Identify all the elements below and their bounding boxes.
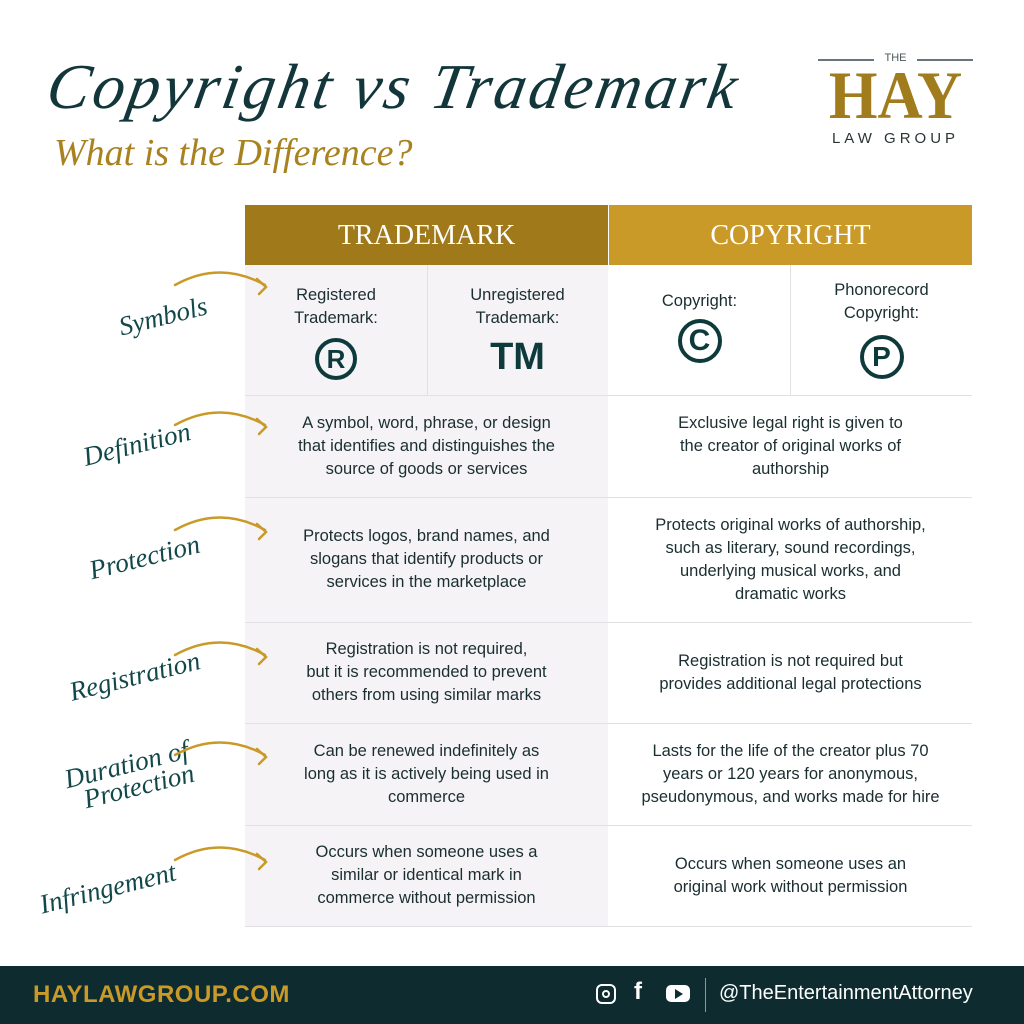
registration row xyxy=(306,640,547,704)
logo xyxy=(818,52,973,147)
definition row: source of goods or services xyxy=(326,460,527,478)
text: Protection xyxy=(80,758,197,814)
text: authorship xyxy=(752,460,829,478)
duration row: long as it is actively being used in xyxy=(304,764,549,782)
text: Definition xyxy=(80,416,194,472)
symbol: TM xyxy=(470,286,565,378)
definition row: that identifies and distinguishes the xyxy=(298,436,555,454)
symbol: phonorecord: Copyright: xyxy=(844,304,919,322)
definition row xyxy=(298,414,555,478)
symbol: copyright: C xyxy=(689,324,710,357)
social icons xyxy=(596,984,616,1004)
symbol: registered: Trademark: xyxy=(294,309,378,327)
registration row: but it is recommended to prevent xyxy=(306,663,547,681)
symbol: registered: R xyxy=(327,344,345,374)
text: the creator of original works of xyxy=(680,436,901,454)
symbol: registered xyxy=(294,286,378,380)
infringement row: Occurs when someone uses a xyxy=(316,843,537,861)
symbol: TM: Trademark: xyxy=(476,309,559,327)
subtitle: What is the Difference? xyxy=(54,132,412,174)
duration row xyxy=(304,742,549,806)
footer xyxy=(0,966,1024,1024)
protection row: slogans that identify products or xyxy=(310,550,543,568)
infringement row: similar or identical mark in xyxy=(331,866,522,884)
handle: @TheEntertainmentAttorney xyxy=(719,982,973,1004)
symbol: TM: Unregistered xyxy=(470,286,565,304)
text: such as literary, sound recordings, xyxy=(665,538,916,556)
text: pseudonymous, and works made for hire xyxy=(641,788,940,806)
header: copyright xyxy=(609,205,972,265)
arrows xyxy=(174,271,268,870)
symbol: phonorecord xyxy=(834,281,929,379)
text: years or 120 years for anonymous, xyxy=(663,764,918,782)
footer: f xyxy=(634,978,642,1005)
registration row: others from using similar marks xyxy=(312,686,541,704)
logo: HAY xyxy=(829,57,962,133)
duration row: commerce xyxy=(388,788,465,806)
symbol: registered: Registered xyxy=(296,286,376,304)
infringement row: commerce without permission xyxy=(317,889,536,907)
title: Copyright vs Trademark xyxy=(42,51,746,122)
symbol: phonorecord: Phonorecord xyxy=(834,281,929,299)
logo: THE xyxy=(884,52,906,64)
protection row: services in the marketplace xyxy=(327,573,526,591)
definition row: A symbol, word, phrase, or design xyxy=(302,414,551,432)
text: Exclusive legal right is given to xyxy=(678,414,903,432)
row labels: Symbols xyxy=(116,291,210,341)
text: dramatic works xyxy=(735,584,846,602)
text: Protects original works of authorship, xyxy=(655,516,926,534)
text: Lasts for the life of the creator plus 70 xyxy=(652,742,929,760)
symbol: phonorecord: P xyxy=(872,341,891,372)
text: Registration is not required but xyxy=(678,652,903,670)
text: underlying musical works, and xyxy=(680,562,901,580)
text: provides additional legal protections xyxy=(659,674,922,692)
protection row xyxy=(303,527,550,591)
header: trademark xyxy=(245,205,608,265)
text: original work without permission xyxy=(674,878,907,896)
text: Duration of xyxy=(61,734,192,794)
text: Occurs when someone uses an xyxy=(675,854,906,872)
text: Infringement xyxy=(36,857,179,919)
logo: LAW GROUP xyxy=(832,130,959,147)
header: copyright: COPYRIGHT xyxy=(710,220,871,250)
text: Protection xyxy=(86,529,203,585)
registration row: Registration is not required, xyxy=(326,640,527,658)
duration row: Can be renewed indefinitely as xyxy=(314,742,539,760)
infringement row xyxy=(316,843,538,907)
symbol: copyright xyxy=(662,292,737,363)
symbol: copyright: Copyright: xyxy=(662,292,737,310)
table background xyxy=(245,265,608,926)
text: Registration xyxy=(66,645,203,707)
website: HAYLAWGROUP.COM xyxy=(33,981,290,1008)
protection row: Protects logos, brand names, and xyxy=(303,527,550,545)
symbol: TM: TM xyxy=(490,336,545,378)
header: trademark: TRADEMARK xyxy=(338,220,515,250)
